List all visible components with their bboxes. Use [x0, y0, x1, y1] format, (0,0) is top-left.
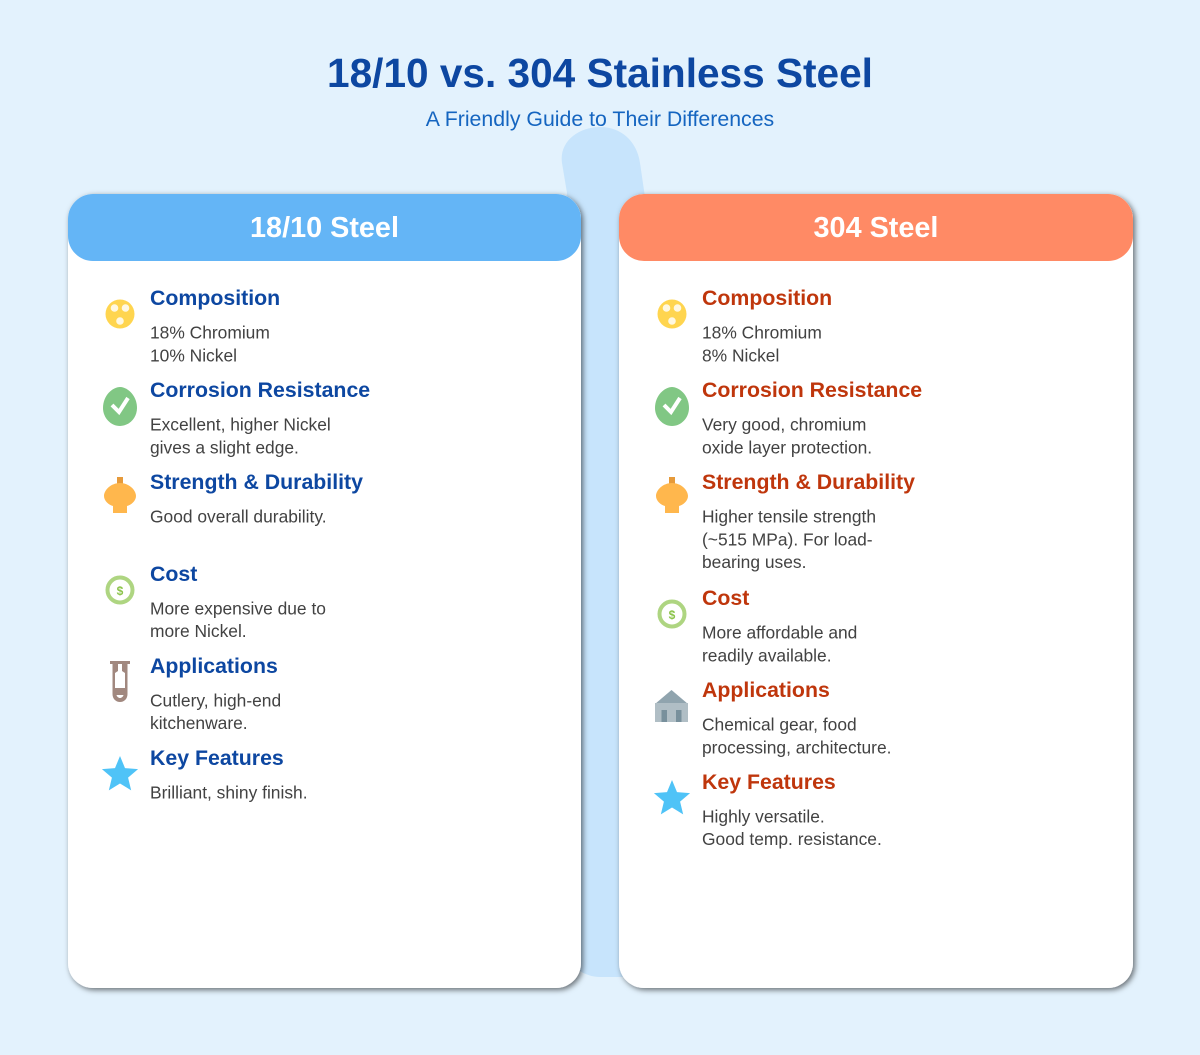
composition text: 18% Chromium: [150, 322, 270, 342]
item: cost: [660, 586, 857, 666]
corrosion text: [702, 378, 922, 458]
applications text: kitchenware.: [150, 713, 248, 733]
key features text: Good temp. resistance.: [702, 829, 882, 849]
subtitle: A Friendly Guide to Their Differences: [426, 107, 774, 131]
key features text: Highly versatile.: [702, 806, 825, 826]
item: key features: [654, 770, 882, 849]
strength text: Higher tensile strength: [702, 506, 876, 526]
cost text: More expensive due to: [150, 598, 326, 618]
strength text: bearing uses.: [702, 552, 806, 572]
panel: 304 steel: [619, 194, 1133, 988]
applications text: Cutlery, high-end: [150, 690, 281, 710]
icon: cost coin: [660, 602, 684, 626]
item: corrosion resistance: [103, 378, 370, 458]
cost text: [150, 562, 326, 641]
title: 18/10 vs. 304 Stainless Steel: [327, 50, 873, 96]
cost text: readily available.: [702, 646, 832, 666]
panel background: [619, 194, 1133, 988]
strength text: (~515 MPa). For load-: [702, 530, 873, 550]
item: cost: [108, 562, 326, 641]
strength text: Strength & Durability: [150, 470, 363, 494]
composition text: 18% Chromium: [702, 322, 822, 342]
item: strength: [656, 470, 915, 572]
panel header: [619, 194, 1133, 261]
applications text: [150, 654, 281, 733]
applications text: processing, architecture.: [702, 738, 891, 758]
icon: cost coin: [108, 578, 132, 602]
composition text: [150, 286, 280, 366]
item: applications: [655, 678, 891, 758]
cost text: More affordable and: [702, 622, 857, 642]
applications text: [702, 678, 891, 758]
item: corrosion resistance: [655, 378, 922, 458]
item: applications: [110, 654, 281, 733]
icon: star: [654, 780, 690, 814]
icon: star: [102, 756, 138, 790]
panel header: [68, 194, 581, 261]
icon: test tube: [110, 661, 130, 702]
key features text: Key Features: [150, 746, 284, 770]
cost text: more Nickel.: [150, 621, 247, 641]
key features text: [702, 770, 882, 849]
icon: strength: [104, 477, 136, 513]
corrosion text: oxide layer protection.: [702, 438, 872, 458]
icon: composition: [106, 300, 134, 328]
cost text: Cost: [702, 586, 749, 610]
item: key features: [102, 746, 308, 802]
composition text: Composition: [702, 286, 832, 310]
icon: building: [655, 690, 688, 722]
corrosion text: gives a slight edge.: [150, 438, 299, 458]
panel heading: 18/10 Steel: [250, 212, 399, 244]
cost text: Cost: [150, 562, 197, 586]
icon: shield check: [103, 387, 137, 426]
central connecting band: [560, 127, 660, 977]
strength text: [702, 470, 915, 572]
key features text: [150, 746, 308, 802]
strength text: Good overall durability.: [150, 506, 327, 526]
icon: composition: [658, 300, 686, 328]
item: composition: [658, 286, 832, 366]
applications text: Applications: [702, 678, 830, 702]
item: strength: [104, 470, 363, 526]
strength text: [150, 470, 363, 526]
item: composition: [106, 286, 280, 366]
icon: shield check: [655, 387, 689, 426]
strength text: Strength & Durability: [702, 470, 915, 494]
key features text: Key Features: [702, 770, 836, 794]
icon: strength: [656, 477, 688, 513]
corrosion text: Excellent, higher Nickel: [150, 414, 331, 434]
applications text: Applications: [150, 654, 278, 678]
key features text: Brilliant, shiny finish.: [150, 782, 308, 802]
applications text: Chemical gear, food: [702, 714, 857, 734]
composition text: 8% Nickel: [702, 346, 779, 366]
corrosion text: [150, 378, 370, 458]
composition text: [702, 286, 832, 366]
panel background: [68, 194, 581, 988]
corrosion text: Corrosion Resistance: [702, 378, 922, 402]
cost text: [702, 586, 857, 666]
composition text: Composition: [150, 286, 280, 310]
panel heading: 304 Steel: [814, 212, 938, 244]
corrosion text: Very good, chromium: [702, 414, 866, 434]
composition text: 10% Nickel: [150, 346, 237, 366]
panel: 18/10 steel: [68, 194, 581, 988]
corrosion text: Corrosion Resistance: [150, 378, 370, 402]
